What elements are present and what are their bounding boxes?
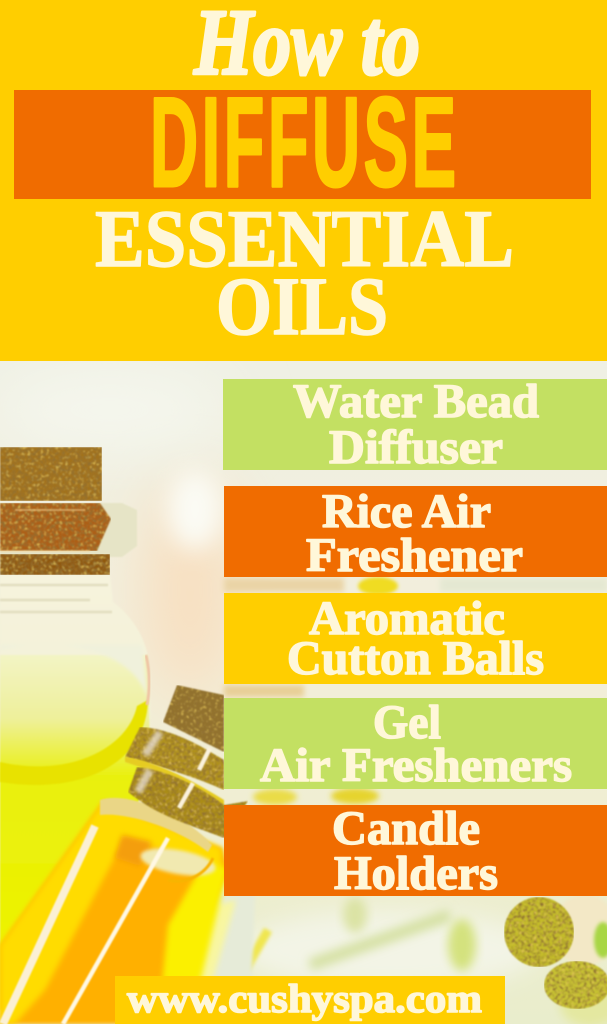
label: candle holders: Candle bbox=[332, 802, 480, 855]
icon: small tilted vial bbox=[0, 685, 255, 1024]
website banner bbox=[115, 976, 505, 1024]
label: rice air freshener: Rice Air bbox=[322, 485, 491, 538]
label: rice air freshener: Freshener bbox=[306, 529, 523, 582]
panel: gel air fresheners bbox=[224, 696, 607, 792]
label: gel air fresheners: Gel bbox=[373, 696, 441, 749]
label: aromatic cutton balls: Aromatic bbox=[309, 592, 505, 645]
label: candle holders bbox=[332, 802, 498, 900]
panel: rice air freshener bbox=[224, 485, 607, 582]
label: rice air freshener bbox=[306, 485, 523, 582]
label: water bead diffuser: Diffuser bbox=[329, 421, 503, 474]
icon: jar cork stopper bbox=[0, 447, 137, 576]
title banner: diffuse bbox=[14, 72, 591, 214]
photo background bbox=[0, 361, 607, 1024]
photo: essential oil bottles and flowers bbox=[0, 361, 607, 1024]
icon: chamomile flowers bbox=[504, 894, 607, 1009]
panel: aromatic cutton balls bbox=[224, 592, 607, 685]
label: water bead diffuser: Water Bead bbox=[293, 375, 539, 428]
website url: www.cushyspa.com bbox=[127, 976, 482, 1021]
label: gel air fresheners: Air Fresheners bbox=[260, 739, 572, 792]
label: gel air fresheners bbox=[260, 696, 572, 792]
label: candle holders: Holders bbox=[334, 847, 498, 900]
title: diffuse: DIFFUSE bbox=[150, 72, 456, 214]
label: aromatic cutton balls bbox=[287, 592, 544, 685]
title: essential: ESSENTIAL bbox=[95, 193, 514, 284]
panel: water bead diffuser bbox=[223, 375, 607, 474]
label: water bead diffuser bbox=[293, 375, 539, 474]
label: aromatic cutton balls: Cutton Balls bbox=[287, 632, 544, 685]
icon: large glass jar with oil bbox=[0, 575, 151, 1010]
header panel bbox=[0, 0, 607, 361]
panel: candle holders bbox=[224, 802, 607, 900]
title: oils: OILS bbox=[216, 260, 388, 352]
